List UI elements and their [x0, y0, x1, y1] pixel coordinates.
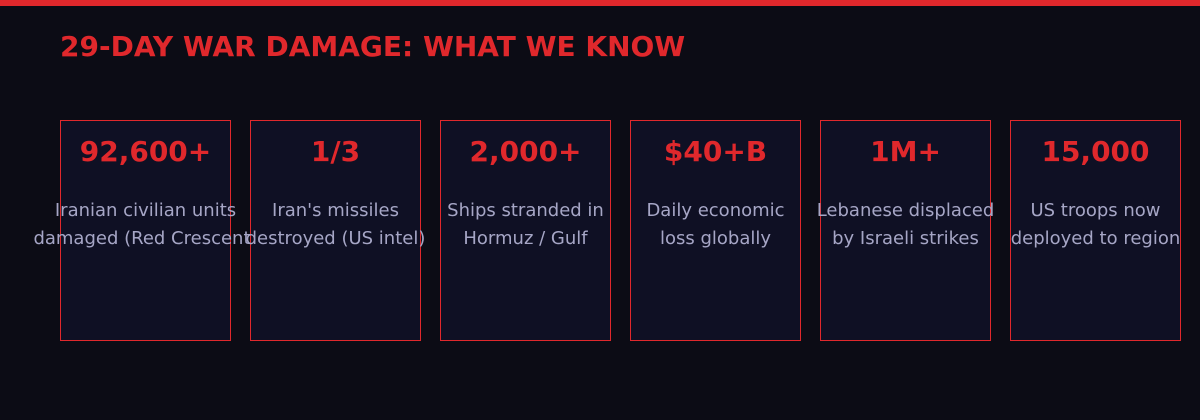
stat number: $40+B [664, 135, 767, 168]
description: Lebanese displaced [817, 200, 994, 221]
stat number: 2,000+ [469, 135, 582, 168]
description: Ships stranded in [447, 200, 604, 221]
description: destroyed (US intel) [246, 228, 425, 249]
description: Iranian civilian units [55, 200, 236, 221]
card: troops [1010, 120, 1181, 341]
title: 29-DAY WAR DAMAGE: WHAT WE KNOW [60, 30, 685, 63]
description: US troops now [1030, 200, 1161, 221]
description: damaged (Red Crescent) [33, 228, 258, 249]
top accent bar [0, 0, 1200, 6]
description: Hormuz / Gulf [463, 228, 588, 249]
card: economic loss [630, 120, 801, 341]
card: ships [440, 120, 611, 341]
card: displaced [820, 120, 991, 341]
description: Daily economic [646, 200, 785, 221]
stat number: 1M+ [870, 135, 941, 168]
card: missiles [250, 120, 421, 341]
description [1011, 200, 1180, 249]
description [447, 200, 604, 249]
description: loss globally [660, 228, 771, 249]
description [646, 200, 785, 249]
card: civilian units [60, 120, 231, 341]
description [33, 200, 258, 249]
stat number: 15,000 [1041, 135, 1150, 168]
stat number: 92,600+ [80, 135, 211, 168]
description: Iran's missiles [272, 200, 399, 221]
description [817, 200, 994, 249]
description: by Israeli strikes [832, 228, 979, 249]
stat number: 1/3 [311, 135, 360, 168]
description: deployed to region [1011, 228, 1180, 249]
description [246, 200, 425, 249]
